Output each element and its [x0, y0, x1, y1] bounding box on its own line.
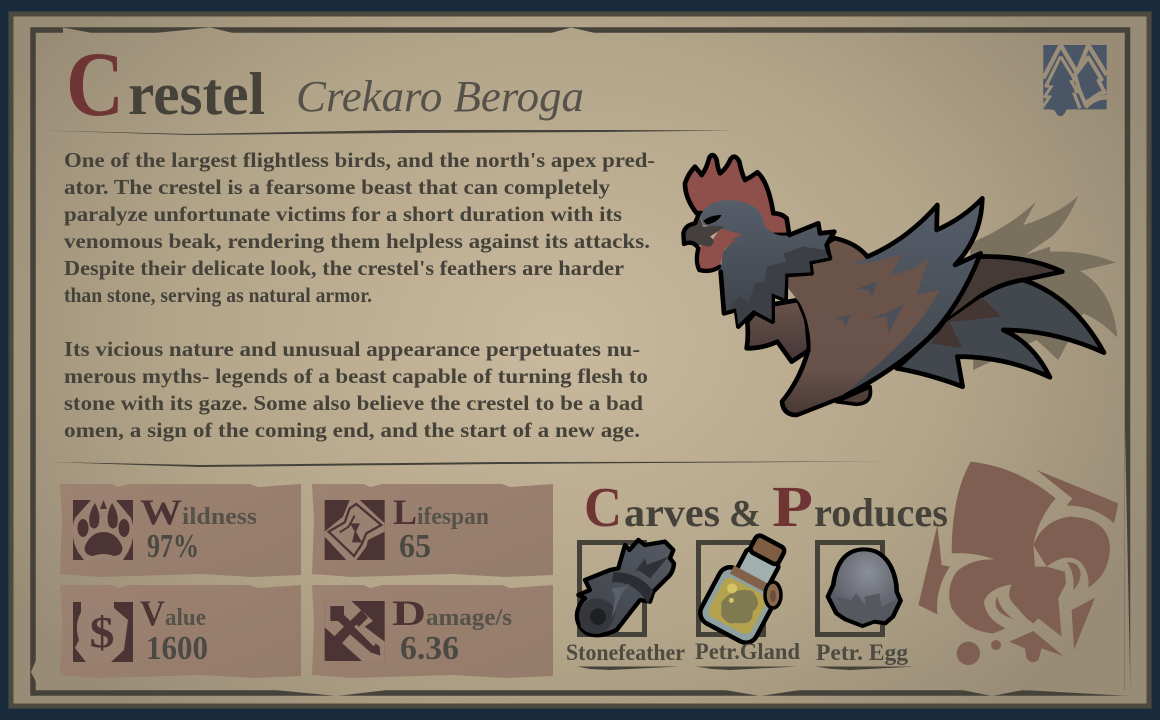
item: stonefeather: [566, 540, 685, 670]
tail shadow: [970, 196, 1117, 370]
label: Petr.Gland: [695, 639, 800, 664]
value: 1600: [146, 630, 208, 667]
description text: paralyze unfortunate victims for a short duration with its: [64, 202, 622, 226]
illustration: crestel rooster: [683, 155, 1117, 415]
heading: carves & produces: [584, 474, 948, 539]
description text: venomous beak, rendering them helpless against its attacks.: [64, 229, 650, 253]
icon: egg: [828, 549, 901, 626]
description text: merous myths- legends of a beast capable of turning flesh to: [64, 364, 648, 388]
leg: [837, 387, 871, 404]
description text: [64, 148, 655, 442]
description text: than stone, serving as natural armor.: [64, 283, 372, 307]
stat: damage: [312, 585, 553, 678]
heading: carves & produces: roduces: [814, 490, 948, 535]
wattle: [697, 228, 743, 271]
icon: bottle: [696, 527, 799, 647]
icon: paw: [73, 500, 133, 560]
stat: wildness: [60, 484, 301, 577]
icon: forest emblem: [1042, 45, 1107, 116]
label: Petr. Egg: [816, 640, 909, 665]
fleur-de-lis emblem: [918, 462, 1118, 665]
rooster head: [683, 155, 834, 327]
label: V: [140, 593, 165, 633]
label: ildness: [182, 504, 257, 530]
description text: stone with its gaze. Some also believe the crestel to be a bad: [64, 391, 643, 415]
label: amage/s: [426, 605, 512, 631]
divider: [50, 462, 885, 467]
underline: [815, 666, 915, 670]
title: [66, 33, 265, 135]
tail grey feathers: [897, 280, 1104, 387]
label: Stonefeather: [566, 640, 685, 665]
neck ruff: [700, 200, 834, 327]
heading: carves & produces: &: [729, 493, 761, 535]
scientific name: Crekaro Beroga: [296, 72, 584, 121]
label: [140, 593, 206, 633]
label: [140, 492, 257, 532]
heading: carves & produces: C: [584, 477, 622, 539]
title: restel: [128, 61, 265, 127]
description text: ator. The crestel is a fearsome beast that can completely: [64, 175, 611, 199]
wing brown plumage: [777, 241, 939, 413]
underline: [577, 666, 680, 670]
icon: coin: $: [90, 608, 114, 657]
underline: [696, 666, 797, 670]
beak: [683, 216, 725, 247]
value: 6.36: [400, 630, 459, 667]
item: petr. egg: [815, 542, 915, 670]
label: D: [392, 593, 426, 633]
description text: Despite their delicate look, the crestel's feathers are harder: [64, 256, 624, 280]
icon: hourglass: [325, 500, 385, 560]
icon: sword: [325, 601, 385, 661]
item: petr. gland: [695, 527, 800, 670]
label: L: [393, 492, 417, 532]
heading: carves & produces: P: [772, 474, 813, 539]
label: ifespan: [417, 504, 489, 530]
icon: coin: [73, 602, 133, 662]
wing: [782, 198, 982, 415]
label: W: [140, 492, 182, 532]
value: 97%: [147, 528, 199, 565]
value: 65: [399, 528, 431, 565]
tail brown feather: [927, 257, 1062, 347]
label: alue: [165, 605, 206, 631]
stat: lifespan: [312, 484, 553, 577]
label: [393, 492, 489, 532]
heading: carves & produces: arves: [624, 490, 720, 535]
description text: omen, a sign of the coming end, and the start of a new age.: [64, 418, 640, 442]
label: [392, 593, 512, 633]
icon: feather roll: [577, 540, 674, 635]
eye: [703, 215, 722, 224]
comb: [685, 155, 789, 235]
title divider: [43, 130, 735, 135]
title: C: [66, 33, 124, 135]
stat: value: [60, 585, 301, 678]
description text: Its vicious nature and unusual appearance perpetuates nu-: [64, 337, 640, 361]
chest: [747, 300, 809, 362]
description text: One of the largest flightless birds, and the north's apex pred-: [64, 148, 655, 172]
